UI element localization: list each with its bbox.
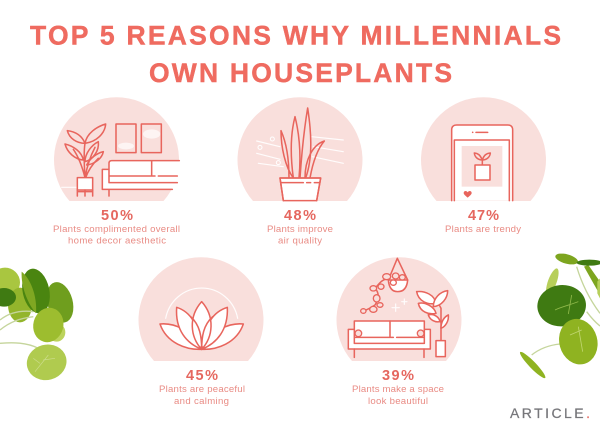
description: home decor: Plants complimented overall	[53, 224, 180, 235]
description: trendy: Plants are trendy	[445, 224, 521, 235]
description: home decor: home decor aesthetic	[68, 236, 166, 246]
illustration: left pilea leaves	[0, 266, 78, 385]
illustration: right pilea leaves	[518, 251, 600, 380]
title: OWN HOUSEPLANTS	[149, 58, 452, 88]
icon: sofa with hanging plant	[337, 257, 462, 361]
description: peaceful: Plants are peaceful	[159, 384, 245, 395]
description: peaceful	[159, 384, 245, 407]
logo: Article: ARTICLE.	[510, 405, 590, 421]
description: beautiful	[352, 384, 444, 407]
description: air quality: air quality	[278, 236, 322, 246]
stat: 48%: 48%	[284, 208, 316, 224]
icon: snake plant	[238, 97, 362, 201]
panel: home decor 50%	[53, 97, 180, 246]
stat: 47%: 47%	[468, 208, 499, 224]
icon: phone with plant	[421, 97, 546, 201]
panel: peaceful 45%	[138, 257, 264, 407]
icon: lotus	[138, 257, 264, 361]
stat: 50%: 50%	[101, 208, 133, 224]
panel: beautiful 39%	[337, 257, 462, 407]
panel: air quality 48%	[238, 97, 362, 246]
description: peaceful: and calming	[174, 396, 229, 407]
description: beautiful: look beautiful	[368, 396, 428, 407]
title	[30, 20, 561, 88]
description: home decor	[53, 224, 180, 246]
panel: trendy 47%	[421, 97, 546, 235]
description: air quality	[267, 224, 333, 246]
description: air quality: Plants improve	[267, 224, 333, 235]
stat: 39%: 39%	[382, 368, 414, 384]
stat: 45%: 45%	[186, 368, 218, 384]
title: TOP 5 REASONS WHY MILLENNIALS	[30, 20, 561, 50]
icon: plant and sofa	[54, 97, 179, 201]
description: beautiful: Plants make a space	[352, 384, 444, 395]
